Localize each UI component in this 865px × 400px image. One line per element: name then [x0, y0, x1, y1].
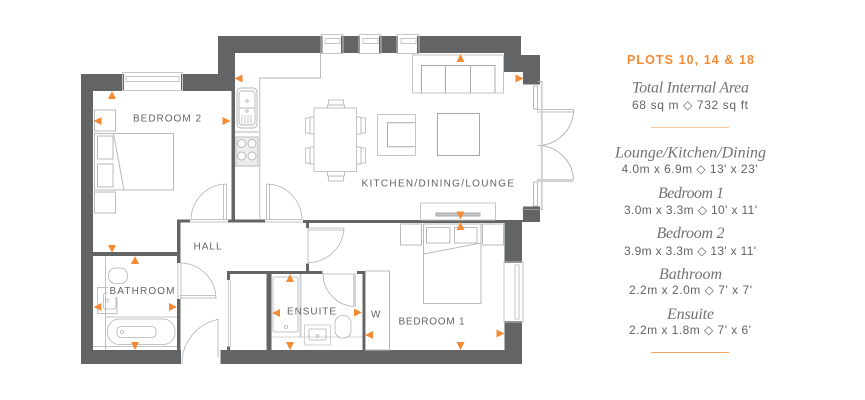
divider — [651, 352, 729, 353]
walls — [81, 36, 540, 364]
lounge dimensions: 4.0m x 6.9m ◇ 13' x 23' — [622, 162, 758, 176]
total area — [632, 80, 749, 112]
bathroom fittings — [93, 256, 177, 350]
bedroom 2 dimensions: 3.9m x 3.3m ◇ 13' x 11' — [624, 244, 756, 258]
bedroom 2 furniture — [94, 110, 174, 213]
lounge dimensions — [614, 144, 766, 176]
plots heading: PLOTS 10, 14 & 18 — [627, 53, 754, 67]
bathroom dimensions: 2.2m x 2.0m ◇ 7' x 7' — [629, 283, 752, 297]
lounge furniture — [378, 55, 504, 220]
total area: 68 sq m ◇ 732 sq ft — [632, 98, 749, 112]
french doors — [522, 81, 574, 210]
bedroom 1 dimensions — [624, 185, 757, 217]
bathroom dimensions: Bathroom — [659, 266, 722, 283]
room labels: KITCHEN/DINING/LOUNGE — [362, 178, 514, 190]
hall cupboard — [228, 280, 230, 347]
bedroom 1 furniture — [366, 224, 504, 350]
room labels: BEDROOM 1 — [398, 316, 465, 328]
divider — [651, 127, 729, 128]
room labels: W — [371, 310, 381, 320]
room labels — [108, 114, 514, 328]
room labels: ENSUITE — [287, 306, 336, 318]
total area: Total Internal Area — [632, 80, 749, 96]
photo viewpoint arrows — [94, 54, 524, 350]
room labels: BATHROOM — [110, 286, 174, 297]
floor plan — [81, 34, 574, 364]
ensuite fittings — [272, 274, 362, 345]
ensuite dimensions: Ensuite — [666, 306, 714, 323]
ensuite dimensions: 2.2m x 1.8m ◇ 7' x 6' — [629, 323, 751, 337]
ensuite dimensions — [629, 306, 751, 337]
bedroom 2 dimensions — [624, 225, 756, 258]
doors — [178, 184, 356, 364]
kitchen units — [235, 53, 320, 220]
windows — [122, 34, 523, 322]
lounge dimensions: Lounge/Kitchen/Dining — [614, 144, 766, 162]
bathroom dimensions — [629, 266, 752, 297]
specification panel — [614, 53, 766, 353]
room labels: BEDROOM 2 — [133, 114, 201, 124]
room labels: HALL — [194, 242, 222, 252]
bedroom 1 dimensions: Bedroom 1 — [658, 185, 724, 202]
bedroom 2 dimensions: Bedroom 2 — [656, 225, 724, 242]
bedroom 1 dimensions: 3.0m x 3.3m ◇ 10' x 11' — [624, 203, 757, 217]
dining table and chairs — [306, 100, 366, 181]
